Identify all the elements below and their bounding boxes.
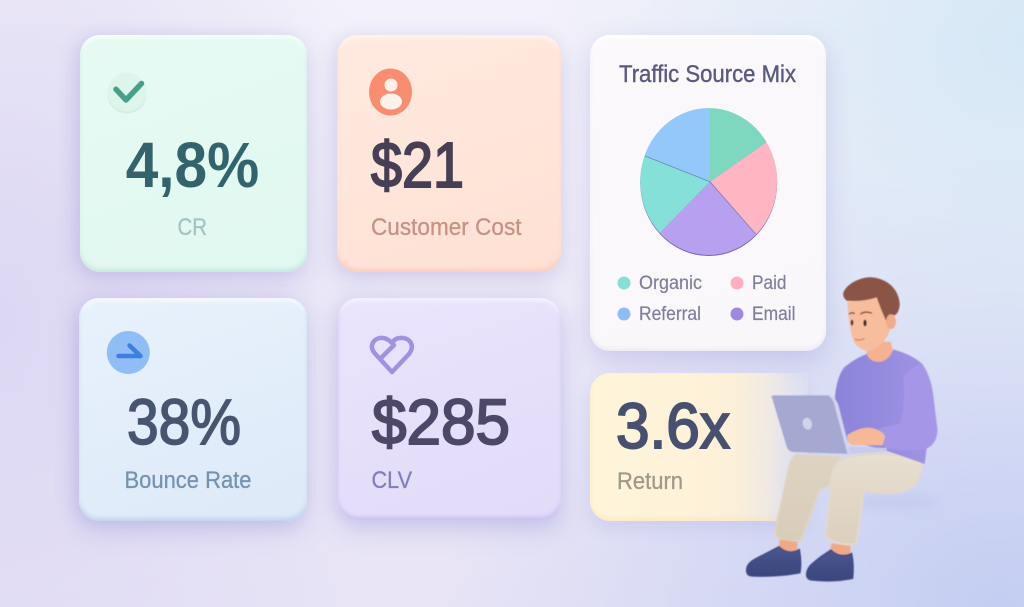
icon: arrow (107, 331, 150, 374)
sleeve shade (879, 363, 937, 450)
KPI card: return (590, 373, 808, 521)
icon: check mark (108, 72, 146, 114)
legend: Paid: Paid (752, 273, 786, 294)
label: Customer Cost: Customer Cost (371, 214, 522, 241)
label: CLV: CLV (372, 467, 412, 494)
legend: Email: Email (752, 304, 796, 325)
back leg (775, 455, 840, 541)
legend: Paid (730, 273, 786, 294)
label: Return: Return (617, 468, 683, 495)
illustration: person with laptop (745, 276, 938, 582)
value: $21: $21 (371, 129, 464, 201)
icon: person (369, 68, 412, 116)
value: $285: $285 (372, 386, 510, 458)
KPI card: customer lifetime value (338, 298, 561, 520)
legend: Organic: Organic (639, 273, 702, 294)
label: Bounce Rate: Bounce Rate (124, 467, 252, 494)
neck (866, 342, 893, 363)
face (847, 297, 891, 351)
hair (843, 277, 900, 321)
laptop (772, 395, 887, 454)
front leg (826, 454, 922, 544)
legend: Email (730, 304, 796, 325)
shadow under figure (840, 493, 940, 510)
value: 3.6x: 3.6x (616, 390, 730, 462)
icon: heart (372, 338, 412, 372)
label: CR: CR (178, 214, 207, 241)
panel: traffic source mix (590, 35, 826, 351)
ankles (778, 539, 851, 557)
legend: Referral (618, 304, 701, 325)
value: 38%: 38% (127, 386, 241, 458)
ear (886, 314, 896, 329)
pie chart (640, 108, 778, 256)
eyes and mouth (849, 312, 871, 340)
KPI card: customer cost (337, 35, 561, 272)
value: 4,8%: 4,8% (126, 129, 259, 201)
shoes (747, 547, 853, 581)
legend: Referral: Referral (639, 304, 701, 325)
heading: Traffic Source Mix: Traffic Source Mix (619, 61, 796, 88)
hand (847, 428, 885, 445)
KPI card: conversion rate (80, 35, 307, 272)
KPI card: bounce rate (79, 298, 307, 521)
sweater (835, 349, 937, 464)
